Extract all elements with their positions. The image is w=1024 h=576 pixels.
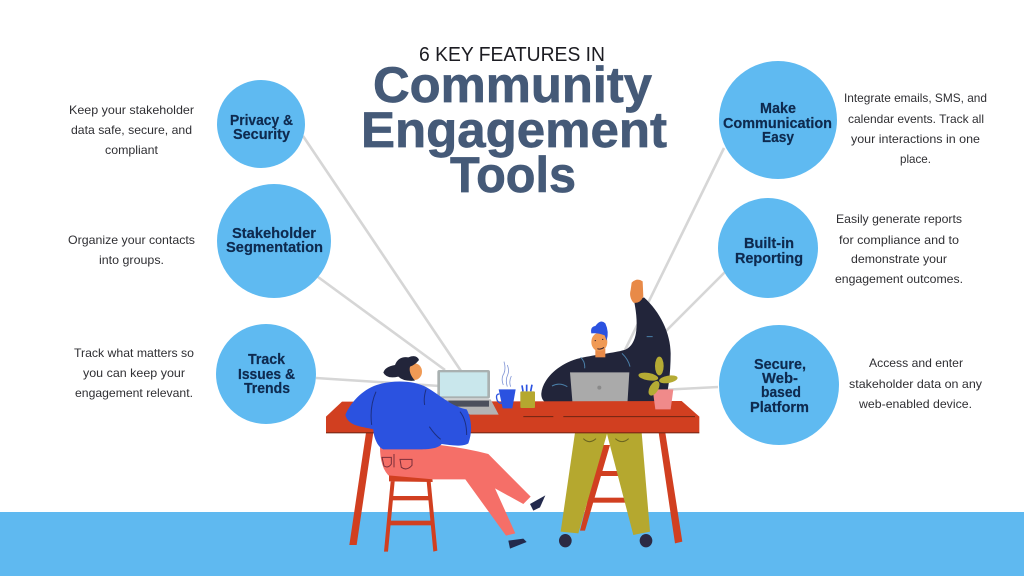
left person: sweater seams [371, 389, 467, 439]
desk [326, 401, 699, 545]
description: web-enabled device. [858, 397, 972, 411]
circle label [230, 113, 293, 143]
circle: Privacy & Security [217, 80, 305, 168]
circle label: Stakeholder [232, 226, 316, 242]
circle label [238, 352, 295, 397]
circle label [723, 101, 832, 146]
description: compliant [105, 143, 159, 157]
plant leaves [638, 357, 678, 397]
circle label: Built-in [744, 236, 794, 252]
feature: Privacy & Security [69, 80, 305, 168]
description: Access and enter [869, 356, 963, 370]
plant pot [653, 389, 673, 409]
description: for compliance and to [839, 233, 959, 247]
desk legs [349, 433, 373, 545]
circle label [735, 236, 803, 267]
title line: Community: Community [373, 57, 652, 113]
left stool [384, 474, 437, 552]
feature: Built-in Reporting [718, 198, 963, 298]
description: engagement relevant. [75, 386, 193, 400]
description: data safe, secure, and [71, 123, 192, 137]
plant [638, 357, 678, 409]
feature: Stakeholder Segmentation [68, 184, 331, 298]
description [835, 212, 963, 286]
title [361, 44, 667, 203]
description [69, 103, 194, 157]
description [68, 233, 195, 267]
circle label: Issues & [238, 367, 295, 383]
left person: trousers [380, 445, 531, 536]
description: calendar events. Track all [848, 112, 984, 126]
pen holder [520, 385, 535, 408]
circle label: Communication [723, 116, 832, 132]
circle label: Platform [750, 400, 809, 416]
description: you can keep your [83, 366, 185, 380]
feature: Secure, Web-based Platform [719, 325, 982, 445]
circle label: Track [248, 352, 286, 368]
back stool under the desk [580, 445, 625, 531]
description: Track what matters so [74, 346, 194, 360]
floor band [0, 512, 1024, 576]
circle label [750, 357, 809, 416]
illustration: two people at a desk [326, 280, 699, 552]
title eyebrow: 6 KEY FEATURES IN [419, 44, 605, 66]
feature: Track Issues & Trends [74, 324, 316, 424]
right person: head [591, 322, 608, 357]
circle label: Security [233, 127, 290, 143]
circle label: Web- [762, 371, 798, 387]
description: into groups. [99, 253, 164, 267]
description: Easily generate reports [836, 212, 962, 226]
circle label: Easy [762, 130, 794, 146]
left person: hair [383, 356, 419, 381]
coffee mug with steam [497, 362, 516, 408]
description: Integrate emails, SMS, and [844, 91, 987, 105]
description: Keep your stakeholder [69, 103, 194, 117]
right person: hair [591, 322, 608, 341]
description: demonstrate your [851, 252, 947, 266]
circle label: Privacy & [230, 113, 293, 129]
circle: Make Communication Easy [719, 61, 837, 179]
circle label: based [761, 385, 801, 401]
description: place. [900, 152, 931, 166]
right person: hand [630, 280, 643, 303]
description: Organize your contacts [68, 233, 195, 247]
right person: face details [595, 339, 604, 349]
description [849, 356, 982, 411]
description: stakeholder data on any [849, 377, 982, 391]
left person: sweater [345, 381, 471, 449]
left laptop [437, 370, 499, 415]
description: engagement outcomes. [835, 272, 963, 286]
circle label: Segmentation [226, 240, 323, 256]
right person: sweater and raised arm [541, 297, 671, 407]
circle label [226, 226, 323, 256]
left person: shoes [508, 495, 545, 549]
circle: Secure, Web-based Platform [719, 325, 839, 445]
title line: Engagement: Engagement [361, 102, 667, 158]
circle label: Secure, [754, 357, 806, 373]
connector lines [303, 136, 725, 390]
right person: sleeve seams [552, 337, 653, 387]
circle label: Trends [244, 381, 290, 397]
description: your interactions in one [851, 132, 980, 146]
circle: Built-in Reporting [718, 198, 818, 298]
feature: Make Communication Easy [719, 61, 987, 179]
description [844, 91, 987, 166]
circle label: Make [760, 101, 796, 117]
right person: shoes [559, 534, 652, 547]
title line: Tools: Tools [450, 147, 576, 203]
left person: head [383, 356, 422, 381]
right person: trousers [561, 433, 650, 535]
circle: Stakeholder Segmentation [217, 184, 331, 298]
right laptop [570, 372, 629, 408]
left person: pockets [382, 454, 412, 469]
circle label: Reporting [735, 251, 803, 267]
description [74, 346, 194, 400]
desk top [326, 401, 699, 433]
circle: Track Issues & Trends [216, 324, 316, 424]
